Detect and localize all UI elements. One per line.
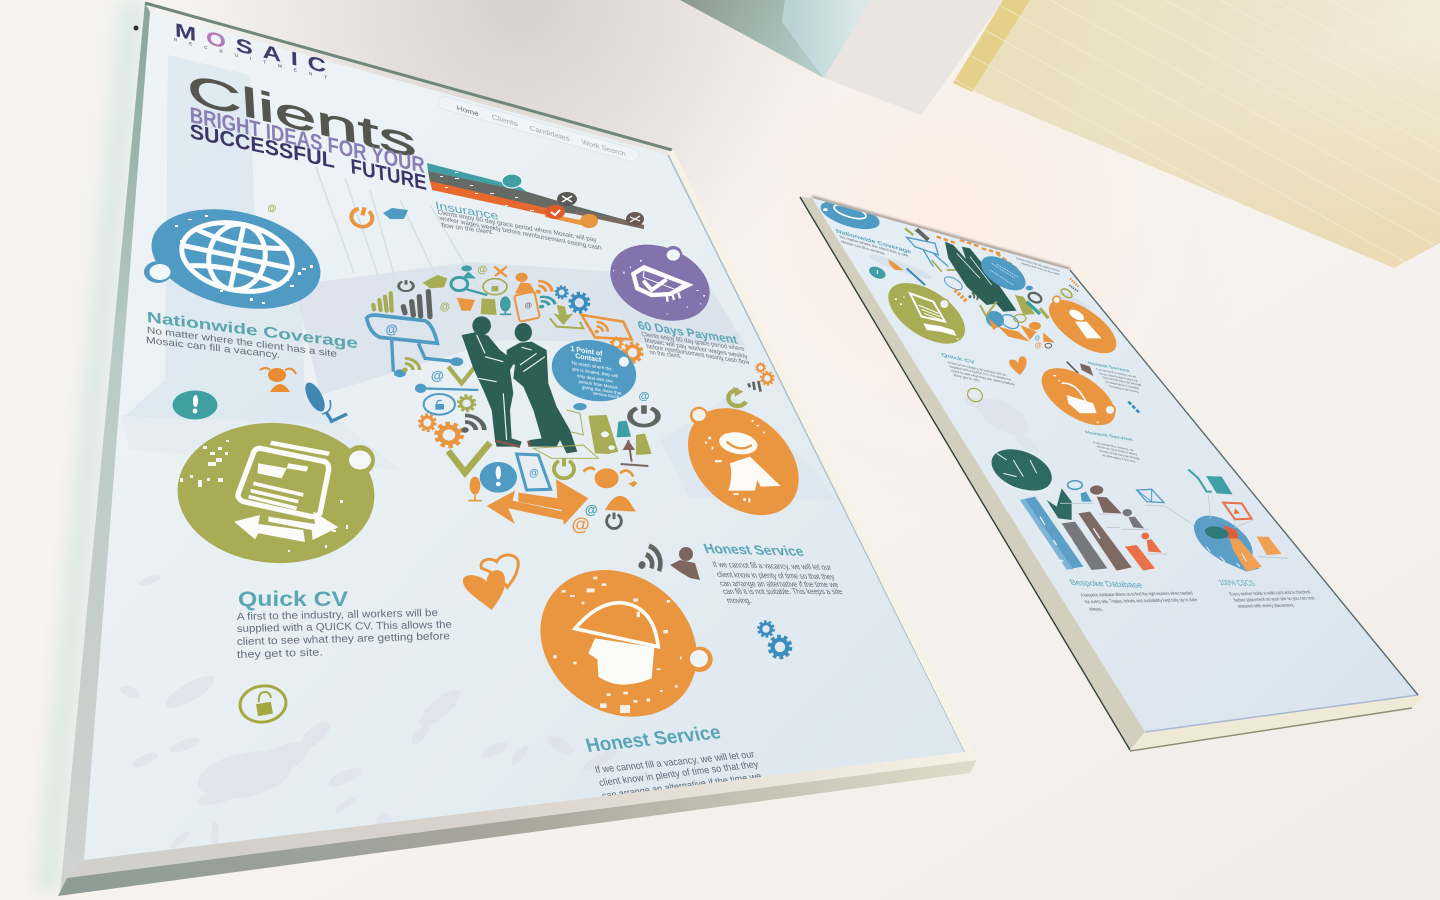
cluster: top bars and tags: @ (440, 301, 450, 313)
small Nationwide heading: Nationwide Coverage (836, 229, 913, 256)
small Honest Service text (1095, 367, 1142, 394)
cluster: bottom icons: @ (572, 514, 590, 535)
cluster: bottom icons (468, 454, 637, 535)
cluster: right tools (533, 390, 658, 466)
logo: Mosaic Recruitment: M O SAIC (175, 19, 326, 77)
Quick CV body text: A first to the industry, all workers will be (237, 607, 438, 623)
small cluster top icons (905, 228, 1017, 302)
Honest Service upper text: client know in plenty of time so that they (715, 569, 836, 581)
icon: blue gears (758, 622, 790, 658)
icon: orange person (260, 368, 296, 392)
subtitle: Successful future: SUCCESSFUL (189, 120, 335, 173)
small Quick CV text: they get to site. (953, 373, 981, 383)
Honest Service helmet badge (512, 540, 726, 747)
hand and card icon (633, 267, 688, 302)
callout: 1 Point of Contact: Contact (575, 353, 602, 364)
small lock icon (967, 388, 983, 402)
small lower Honest text (1092, 441, 1141, 464)
insurance text (434, 200, 603, 252)
small poster sheet (812, 198, 1418, 732)
callout: 1 Point of Contact: only deal with one (577, 373, 613, 384)
60 days body text: on the client. (649, 349, 683, 360)
smiling worker badge (667, 387, 820, 537)
paint splatter texture (119, 572, 620, 851)
small Honest Service text: If we cannot fill a vacancy, we will (1095, 367, 1137, 379)
central icon cluster (367, 265, 774, 535)
callout: 1 Point of Contact (546, 332, 642, 409)
Honest Service lower text (594, 749, 763, 802)
callout: 1 Point of Contact: service touch. (593, 390, 621, 400)
cluster: bottom icons: @ (585, 502, 598, 517)
cluster: left chat and circuit (367, 315, 490, 473)
small cluster lower icons: @ (1035, 335, 1040, 341)
60 days payment badge (599, 231, 721, 335)
small lower Honest text: an alternative if the time (1101, 453, 1137, 464)
60 days body text: before reimbursement easing cash flow (646, 343, 751, 366)
subtitle: Successful future (189, 120, 427, 195)
small Quick CV text: client to see what they are getting before (950, 369, 1015, 387)
small men silhouette (945, 242, 1017, 312)
small lower Honest text: will let our client know in plenty (1096, 445, 1138, 456)
small lower Honest text: of time so that they can arrange (1098, 449, 1141, 461)
60 days body text: Mosaic will pay worker wages weekly (644, 337, 749, 361)
bar icon markers (502, 174, 644, 228)
large poster (58, 3, 977, 896)
small worker badge (1048, 295, 1116, 354)
small Quick CV text: supplied with a QUICK CV. This allows the (949, 365, 1012, 382)
small poster upper section (817, 195, 1142, 464)
men shaking hands silhouette (462, 316, 577, 453)
heading: Nationwide Coverage: Nationwide Coverage (147, 309, 358, 352)
small helmet badge (1042, 368, 1116, 426)
small lower Honest text: If we cannot fill a vacancy, we (1092, 441, 1135, 452)
navigation pill: Home (456, 104, 479, 118)
worker icon (717, 429, 781, 491)
Honest Service lower text: can arrange an alternative if the time we (601, 771, 763, 802)
small Quick CV heading: Quick CV (940, 352, 977, 366)
insurance text: flow on the client. (441, 222, 495, 236)
globe badge (142, 194, 330, 324)
Bespoke Database text: always. (1088, 607, 1104, 613)
Honest Service upper text: can arrange an alternative if the time we (718, 578, 840, 589)
striped infographic bars (427, 163, 644, 229)
Bespoke Database text: A bespoke database allows us to find the right workers when needed (1080, 591, 1194, 599)
heading: Bespoke Database: Bespoke Database (1068, 578, 1145, 590)
Quick CV body text: supplied with a QUICK CV. This allows the (237, 619, 452, 635)
scattered small icons (268, 203, 408, 229)
large poster frame (58, 3, 977, 896)
small wifi and person icons (1067, 362, 1093, 376)
Quick CV body text: they get to site. (237, 646, 323, 661)
ceiling recess box (680, 0, 1003, 115)
database chart (985, 441, 1155, 571)
small Quick CV text (947, 361, 1015, 387)
logo: Mosaic Recruitment: RECRUITMENT (174, 37, 327, 80)
small lower Honest heading: Honest Service (1084, 430, 1135, 443)
subtitle: Bright ideas: BRIGHT IDEAS FOR YOUR (189, 102, 425, 178)
globe icon (175, 213, 299, 301)
Quick CV body text: client to see what they are getting before (237, 630, 450, 648)
small top right icons (1060, 278, 1078, 299)
small Nationwide text: No matter where the client has a site (839, 235, 909, 258)
small poster (800, 195, 1425, 751)
small Honest Service text: let our client know in plenty of (1098, 372, 1139, 383)
heading: 60 Days Payment: 60 Days Payment (636, 318, 739, 347)
cluster: right tools: @ (638, 390, 649, 402)
helmet and head icon (575, 603, 658, 685)
Honest Service lower text: client know in plenty of time so that they (598, 759, 760, 789)
CSCS text: before placement on your site so you can rest (1233, 596, 1317, 603)
icon: hearts (463, 555, 518, 610)
small text upper right: Clients enjoy 60 day grace period (1015, 256, 1061, 273)
small teal alert (869, 266, 886, 279)
callout: 1 Point of Contact: giving the client that (582, 385, 622, 396)
Bespoke Database text: for every site. Trades, tickets and availability kept fully up to date (1084, 597, 1199, 605)
Nationwide body text: No matter where the client has a site (147, 325, 337, 360)
cluster: top bars and tags (373, 265, 642, 362)
icons: wifi and brown person (637, 545, 700, 580)
Quick CV body text (237, 607, 452, 661)
large poster sheet (84, 12, 965, 860)
Honest Service lower text: If we cannot fill a vacancy, we will let our (594, 749, 757, 776)
CSCS connector icons (1137, 469, 1288, 558)
small contact callout (981, 256, 1026, 290)
CSCS text: assured with every placement. (1236, 603, 1296, 609)
small orange person (888, 259, 903, 270)
small Quick CV text: A first to the industry, all workers will be (947, 361, 1007, 377)
60 days body text (641, 331, 751, 366)
Nationwide body text (146, 325, 337, 361)
small Honest Service text: an alternative if needed (1104, 380, 1140, 390)
small blue mic (907, 268, 925, 285)
small Honest Service text: time so that they can arrange (1102, 376, 1142, 387)
navigation pill: Clients (491, 113, 519, 128)
60 days body text: Clients enjoy 60 day grace period where (641, 331, 746, 353)
small olive CV badge (888, 283, 965, 344)
heading: Honest Service lower: Honest Service (583, 721, 724, 757)
small text upper right: easing cash flow on the client (1020, 261, 1061, 276)
callout: 1 Point of Contact: No match where the (571, 360, 612, 372)
CSCS text (1229, 590, 1315, 608)
slatted ceiling panel (953, 0, 1440, 268)
Honest Service upper text: can fill it is not suitable. This keeps a site (721, 586, 844, 596)
small poster splatter (869, 254, 1090, 430)
insurance text: worker wages weekly before reimbursement easing cash (438, 215, 603, 252)
small poster shadow (812, 197, 1070, 269)
small poster lower section (985, 441, 1317, 613)
insurance text: Insurance (434, 200, 500, 223)
small gears (1128, 402, 1140, 413)
callout: 1 Point of Contact: 1 Point of (570, 346, 603, 358)
callout: 1 Point of Contact: site is located, they will (572, 366, 618, 379)
icon: open padlock (238, 683, 288, 725)
small cluster lower icons (980, 286, 1055, 349)
heading: 100% CSCS: 100% CSCS (1216, 578, 1257, 588)
cluster: bottom icons: @ (529, 468, 539, 479)
icon: blue microphone (301, 380, 347, 422)
faint city backdrop (120, 55, 835, 500)
small Nationwide text: Mosaic can fill a vacancy. (841, 240, 885, 256)
cluster: top bars and tags: @ (525, 300, 532, 309)
heading: Honest Service upper: Honest Service (701, 540, 806, 559)
document and arrows icon (234, 441, 338, 542)
cluster: upper right icons (728, 363, 774, 406)
Nationwide body text: Mosaic can fill a vacancy. (146, 335, 280, 361)
cluster: top bars and tags: @ (477, 265, 487, 276)
large poster artwork (119, 19, 844, 851)
insurance text: Clients enjoy 60 day grace period where Mosaic will pay (437, 209, 598, 244)
callout: 1 Point of Contact: person from Mosaic (578, 379, 619, 390)
scattered small icons: @ (268, 203, 277, 213)
small poster frame (800, 197, 1425, 751)
small hearts (1009, 356, 1027, 375)
title: Clients: Clients (186, 65, 418, 167)
database people icons (1060, 481, 1167, 554)
icon: teal alert (172, 390, 218, 420)
Quick CV badge (174, 418, 378, 568)
small globe badge (820, 202, 880, 230)
subtitle: Successful future: FUTURE (350, 154, 427, 195)
small Honest Service text: This keeps a site moving. (1108, 384, 1140, 394)
navigation pill (445, 103, 632, 158)
CSCS text: Every worker holds a valid card and is checked (1228, 590, 1312, 597)
small Honest Service heading: Honest Service (1087, 360, 1131, 373)
CSCS pie chart (1193, 516, 1262, 572)
navigation pill: Candidates (529, 124, 571, 143)
Honest Service upper text: moving. (725, 595, 753, 605)
small cluster lower icons: @ (1035, 340, 1042, 349)
Honest Service upper text: If we cannot fill a vacancy, we will let our (711, 559, 833, 572)
Bespoke Database text (1080, 591, 1199, 613)
heading: Quick CV: Quick CV (238, 588, 348, 611)
navigation pill: Work Search (581, 138, 626, 158)
cluster: left chat and circuit: @ (431, 368, 444, 383)
small poster content (817, 195, 1317, 613)
Honest Service upper text (711, 559, 844, 605)
cluster: left chat and circuit: @ (385, 322, 398, 336)
